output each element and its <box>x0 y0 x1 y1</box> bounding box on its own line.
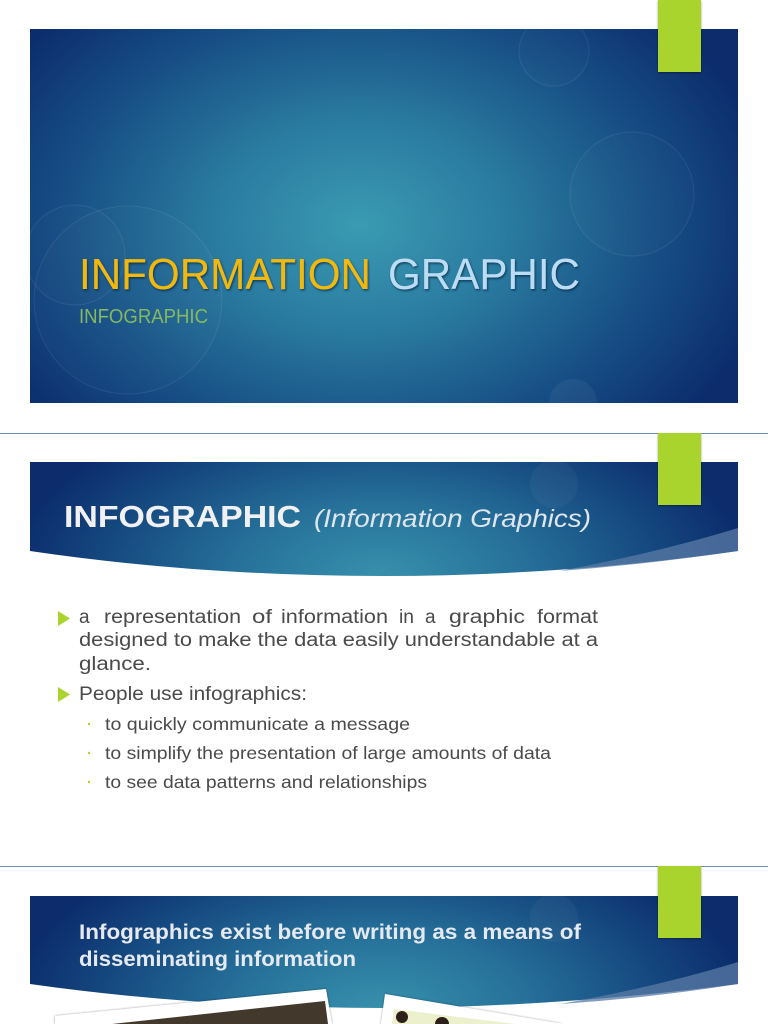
sub bullets: to quickly communicate a message <box>105 714 410 734</box>
panel: definition slide <box>30 460 738 792</box>
bullet list <box>58 607 599 792</box>
divider <box>0 433 768 434</box>
icon: green tab slide 3 <box>658 866 701 938</box>
panel: history slide <box>30 894 738 1024</box>
heading: INFOGRAPHIC <box>64 499 301 534</box>
panel: title slide <box>25 16 738 427</box>
title slide background <box>30 29 738 403</box>
definition text: a <box>425 607 436 628</box>
people use text: People use infographics: <box>79 684 307 705</box>
icon: green tab slide 2 <box>658 433 701 505</box>
sub bullets <box>88 714 551 792</box>
banner <box>30 462 738 576</box>
definition text: in <box>399 607 414 628</box>
icon: green tab slide 1 <box>658 0 701 72</box>
banner <box>30 896 738 1008</box>
decorative circle <box>530 462 578 502</box>
definition text: graphic <box>449 607 525 628</box>
definition text: information <box>281 607 388 628</box>
title text: INFORMATION <box>79 250 371 299</box>
heading: disseminating information <box>79 948 356 971</box>
banner swoosh <box>560 962 738 1004</box>
definition text: format <box>537 607 599 628</box>
divider <box>0 866 768 867</box>
decorative circle <box>531 896 578 934</box>
icon: bullet arrow 2 <box>58 687 70 702</box>
definition text: representation <box>104 607 241 628</box>
definition text: of <box>252 607 273 628</box>
definition text: glance. <box>79 654 151 675</box>
heading: Infographics exist before writing as a means of <box>79 921 582 944</box>
definition text <box>79 607 599 675</box>
decorative bokeh circles <box>25 16 694 427</box>
heading <box>79 921 582 971</box>
photo right <box>381 994 563 1024</box>
sub bullets: to see data patterns and relationships <box>105 772 427 792</box>
heading: (Information Graphics) <box>314 505 591 533</box>
photo left <box>55 989 332 1024</box>
definition text: designed to make the data easily understandable at a <box>79 630 598 651</box>
definition text: a <box>79 607 90 628</box>
banner swoosh <box>560 528 738 571</box>
sub bullets: to simplify the presentation of large amounts of data <box>105 743 551 763</box>
icon: bullet arrow 1 <box>58 611 70 626</box>
title text: GRAPHIC <box>388 250 580 299</box>
subtitle: INFOGRAPHIC <box>79 306 208 328</box>
